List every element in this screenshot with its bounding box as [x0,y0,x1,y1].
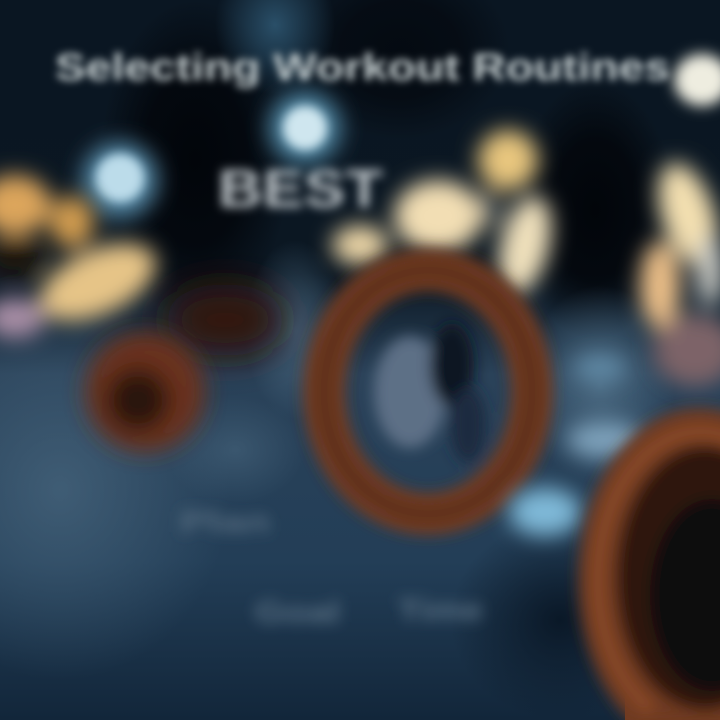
subheading: BEST [218,159,383,219]
light orb: heading right [674,54,720,106]
faint label one: Plan [180,506,270,539]
large copper ring [324,270,532,514]
golden shapes: right [640,156,720,386]
faint label three: Time [398,594,483,627]
cropped copper ring base [625,695,720,720]
golden shapes: left [0,175,168,338]
light orb: top centre [269,92,341,164]
blue glow lower right [509,356,643,536]
heading: Selecting Workout Routines [55,47,670,89]
light orb: left [82,142,158,218]
copper sphere [85,332,205,452]
faint label two: Goal [255,596,340,629]
cropped copper ring right [578,408,720,720]
golden shapes: centre [332,130,560,299]
blurred shadow copper band [165,284,285,356]
